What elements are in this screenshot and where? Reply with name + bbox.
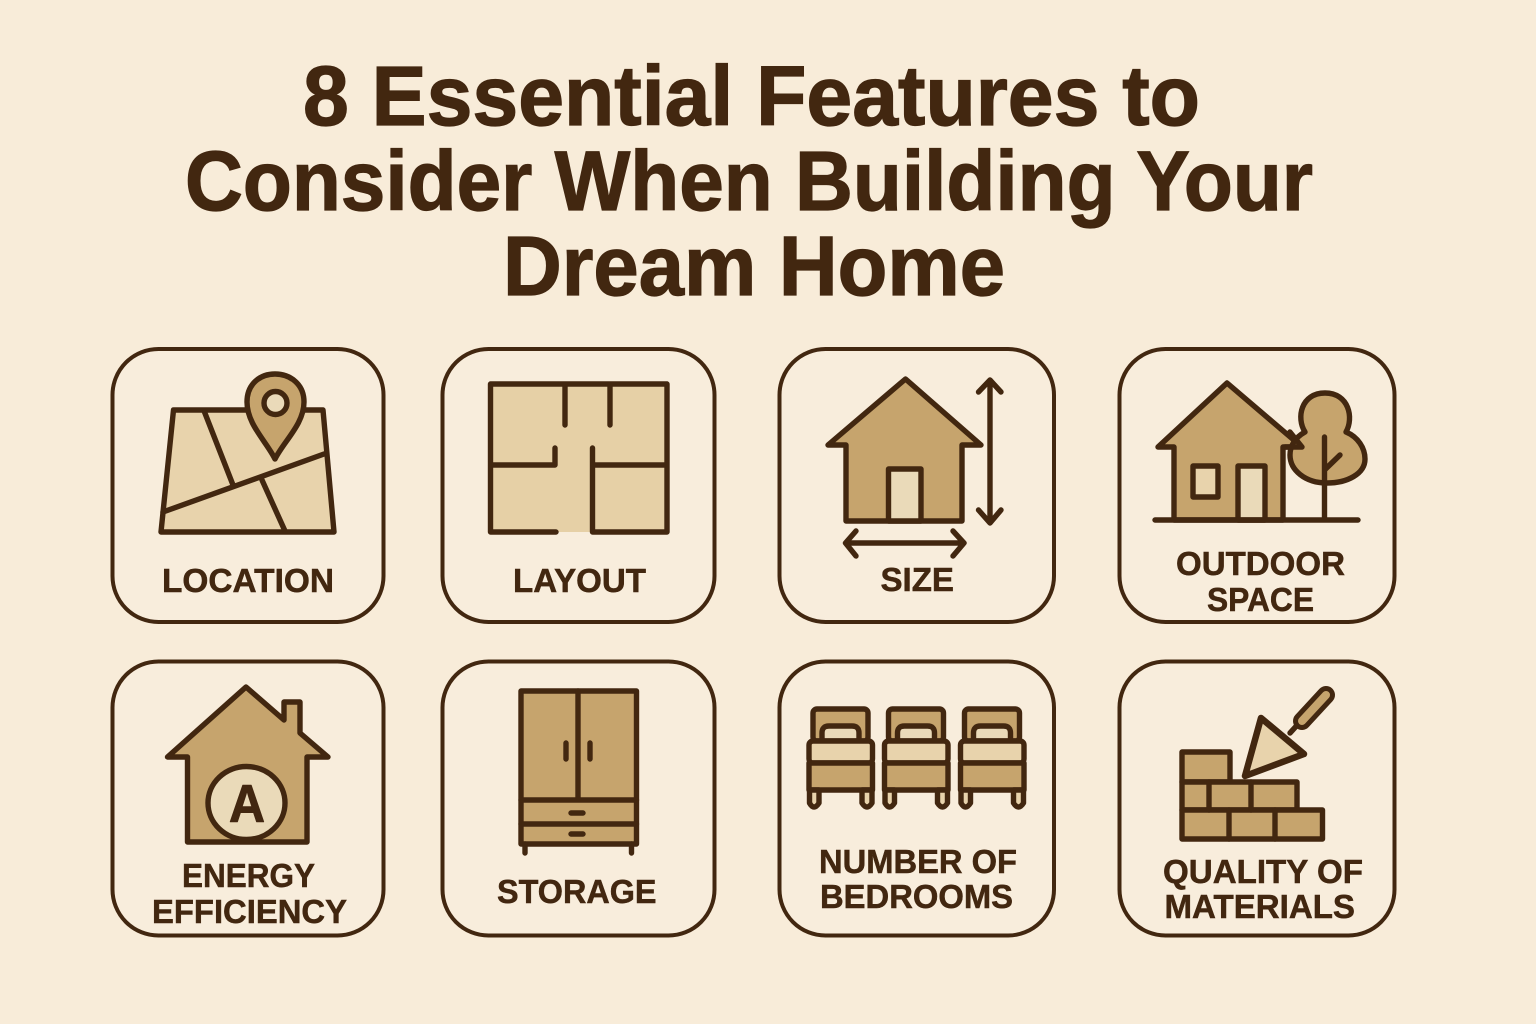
icon: house and tree: [1155, 383, 1365, 520]
label: number of bedrooms: NUMBER OF: [819, 843, 1017, 880]
label: energy efficiency: [152, 857, 347, 930]
label: number of bedrooms: BEDROOMS: [820, 878, 1013, 915]
label: quality of materials: MATERIALS: [1164, 888, 1355, 925]
label: outdoor space: OUTDOOR: [1176, 545, 1345, 582]
panel: layout: [442, 349, 714, 622]
icon: three beds: [809, 709, 1024, 807]
icon: bed two: [884, 709, 948, 807]
icon: house with dimension arrows: [828, 379, 1001, 556]
label: quality of materials: [1163, 853, 1363, 925]
panel: energy efficiency: [112, 662, 384, 936]
panel: storage: [442, 662, 714, 936]
label: layout: LAYOUT: [513, 562, 646, 599]
title: 8 Essential Features to: [303, 49, 1200, 143]
icon: bricks and trowel: [1182, 695, 1326, 839]
icon: bed three: [960, 709, 1024, 807]
title: Dream Home: [503, 219, 1005, 313]
icon: house with A rating: A: [229, 775, 265, 834]
icon: bed one: [809, 709, 872, 807]
label: storage: STORAGE: [497, 873, 656, 910]
label: number of bedrooms: [819, 843, 1017, 915]
icon: wardrobe: [521, 691, 636, 853]
label: location: LOCATION: [162, 562, 334, 599]
label: energy efficiency: ENERGY: [182, 857, 315, 894]
panel: outdoor space: [1120, 349, 1394, 622]
label: outdoor space: [1176, 545, 1345, 618]
panel: size: [780, 349, 1054, 622]
panel: location: [112, 349, 384, 622]
panel: quality of materials: [1120, 662, 1394, 936]
icon: floor plan: [490, 384, 667, 532]
label: energy efficiency: EFFICIENCY: [152, 893, 347, 930]
title: [185, 49, 1313, 313]
icon: map with pin: [161, 374, 334, 532]
label: quality of materials: QUALITY OF: [1163, 853, 1363, 890]
icon: house with A rating: [168, 687, 328, 842]
panel: number of bedrooms: [780, 662, 1054, 936]
label: outdoor space: SPACE: [1207, 581, 1314, 618]
label: size: SIZE: [880, 561, 954, 598]
title: Consider When Building Your: [185, 134, 1313, 228]
